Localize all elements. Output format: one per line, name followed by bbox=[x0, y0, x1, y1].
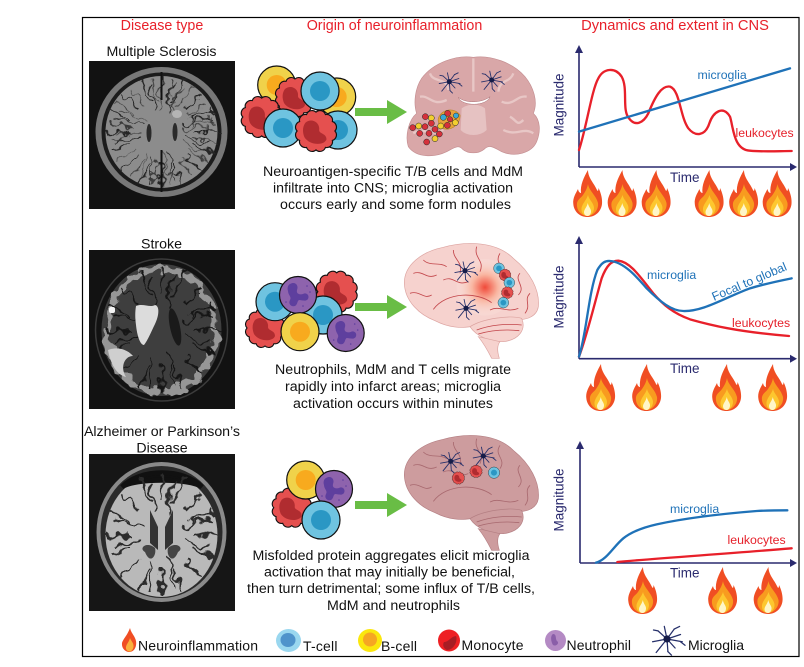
y axis label: Magnitude bbox=[552, 265, 566, 329]
curve label: leukocytes: leukocytes bbox=[736, 126, 794, 140]
legend: B-cell: B-cell bbox=[381, 638, 417, 654]
chart: magnitude over time, relapsing bbox=[552, 45, 797, 185]
disease name bbox=[84, 424, 240, 456]
legend: neutrophil: Neutrophil bbox=[566, 637, 631, 653]
arrow bbox=[355, 493, 407, 517]
curve label: microglia: microglia bbox=[698, 68, 747, 82]
disease name: Stroke bbox=[141, 236, 182, 252]
arrow bbox=[355, 295, 407, 319]
flames row bbox=[628, 567, 783, 614]
cell cluster: T cells, B cells, monocytes bbox=[241, 66, 357, 151]
description text: Neuroantigen-specific T/B cells and MdM bbox=[263, 164, 523, 180]
legend: neuroinflammation bbox=[122, 628, 258, 654]
y axis label: Magnitude bbox=[552, 73, 566, 137]
y axis label: Magnitude bbox=[552, 468, 566, 532]
description text: Neutrophils, MdM and T cells migrate bbox=[275, 362, 511, 378]
brain: lateral degenerative bbox=[404, 435, 539, 550]
panel: multiple sclerosis row bbox=[89, 44, 797, 217]
legend: neutrophil bbox=[545, 630, 631, 653]
x axis label: Time bbox=[670, 170, 700, 185]
brain: coronal section with infiltrates bbox=[407, 57, 539, 156]
brain: lateral with infarct bbox=[404, 243, 539, 358]
legend: B-cell bbox=[358, 629, 417, 654]
curve label: leukocytes: leukocytes bbox=[728, 533, 786, 547]
curve label: microglia: microglia bbox=[647, 268, 696, 282]
legend: microglia: Microglia bbox=[688, 637, 744, 653]
disease name: Multiple Sclerosis bbox=[106, 44, 216, 60]
heading: dynamics and extent in CNS: Dynamics and extent in CNS bbox=[581, 18, 769, 34]
curve label: leukocytes: leukocytes bbox=[732, 316, 790, 330]
MRI scan: stroke bbox=[89, 250, 235, 409]
panel: stroke row bbox=[89, 236, 797, 412]
disease name: Alzheimer or Parkinson’s bbox=[84, 424, 240, 440]
description text: then turn detrimental; some influx of T/B cells, bbox=[247, 581, 535, 597]
cell cluster: monocyte, B cell, neutrophil, T cell bbox=[272, 461, 352, 539]
description text bbox=[263, 164, 523, 213]
description text: occurs early and some form nodules bbox=[280, 197, 511, 213]
description text: rapidly into infarct areas; microglia bbox=[285, 379, 501, 395]
legend: monocyte: Monocyte bbox=[462, 637, 524, 653]
description text: infiltrate into CNS; microglia activation bbox=[273, 180, 513, 196]
cell cluster: neutrophils, monocytes, T and B cells bbox=[246, 271, 364, 352]
MRI scan: multiple sclerosis bbox=[89, 61, 235, 209]
legend: T-cell bbox=[276, 629, 338, 654]
MRI scan: Alzheimer or Parkinson's bbox=[89, 454, 235, 611]
legend: neuroinflammation: Neuroinflammation bbox=[138, 638, 258, 654]
x axis label: Time bbox=[670, 361, 700, 376]
flames row bbox=[573, 170, 792, 217]
description text: activation occurs within minutes bbox=[293, 396, 493, 412]
heading: disease type: Disease type bbox=[121, 18, 203, 34]
description text: activation that may initially be beneficial, bbox=[264, 565, 515, 581]
curve label: focal to global: Focal to global bbox=[710, 260, 789, 304]
legend: monocyte bbox=[438, 630, 524, 653]
curve label: microglia: microglia bbox=[670, 502, 719, 516]
chart: magnitude over time, chronic bbox=[552, 441, 797, 580]
x axis label: Time bbox=[670, 566, 700, 580]
legend: microglia bbox=[653, 626, 744, 655]
description text bbox=[247, 548, 535, 614]
heading: origin of neuroinflammation: Origin of neuroinflammation bbox=[307, 18, 482, 34]
description text: Misfolded protein aggregates elicit microglia bbox=[252, 548, 530, 564]
arrow bbox=[355, 100, 407, 124]
description text bbox=[275, 362, 511, 412]
legend: T-cell: T-cell bbox=[303, 638, 338, 654]
chart: magnitude over time, acute bbox=[552, 236, 797, 376]
description text: MdM and neutrophils bbox=[327, 598, 460, 614]
flames row bbox=[586, 364, 787, 411]
disease name: Disease bbox=[136, 440, 188, 456]
legend bbox=[122, 626, 744, 655]
panel: Alzheimer or Parkinson's row bbox=[84, 424, 797, 614]
